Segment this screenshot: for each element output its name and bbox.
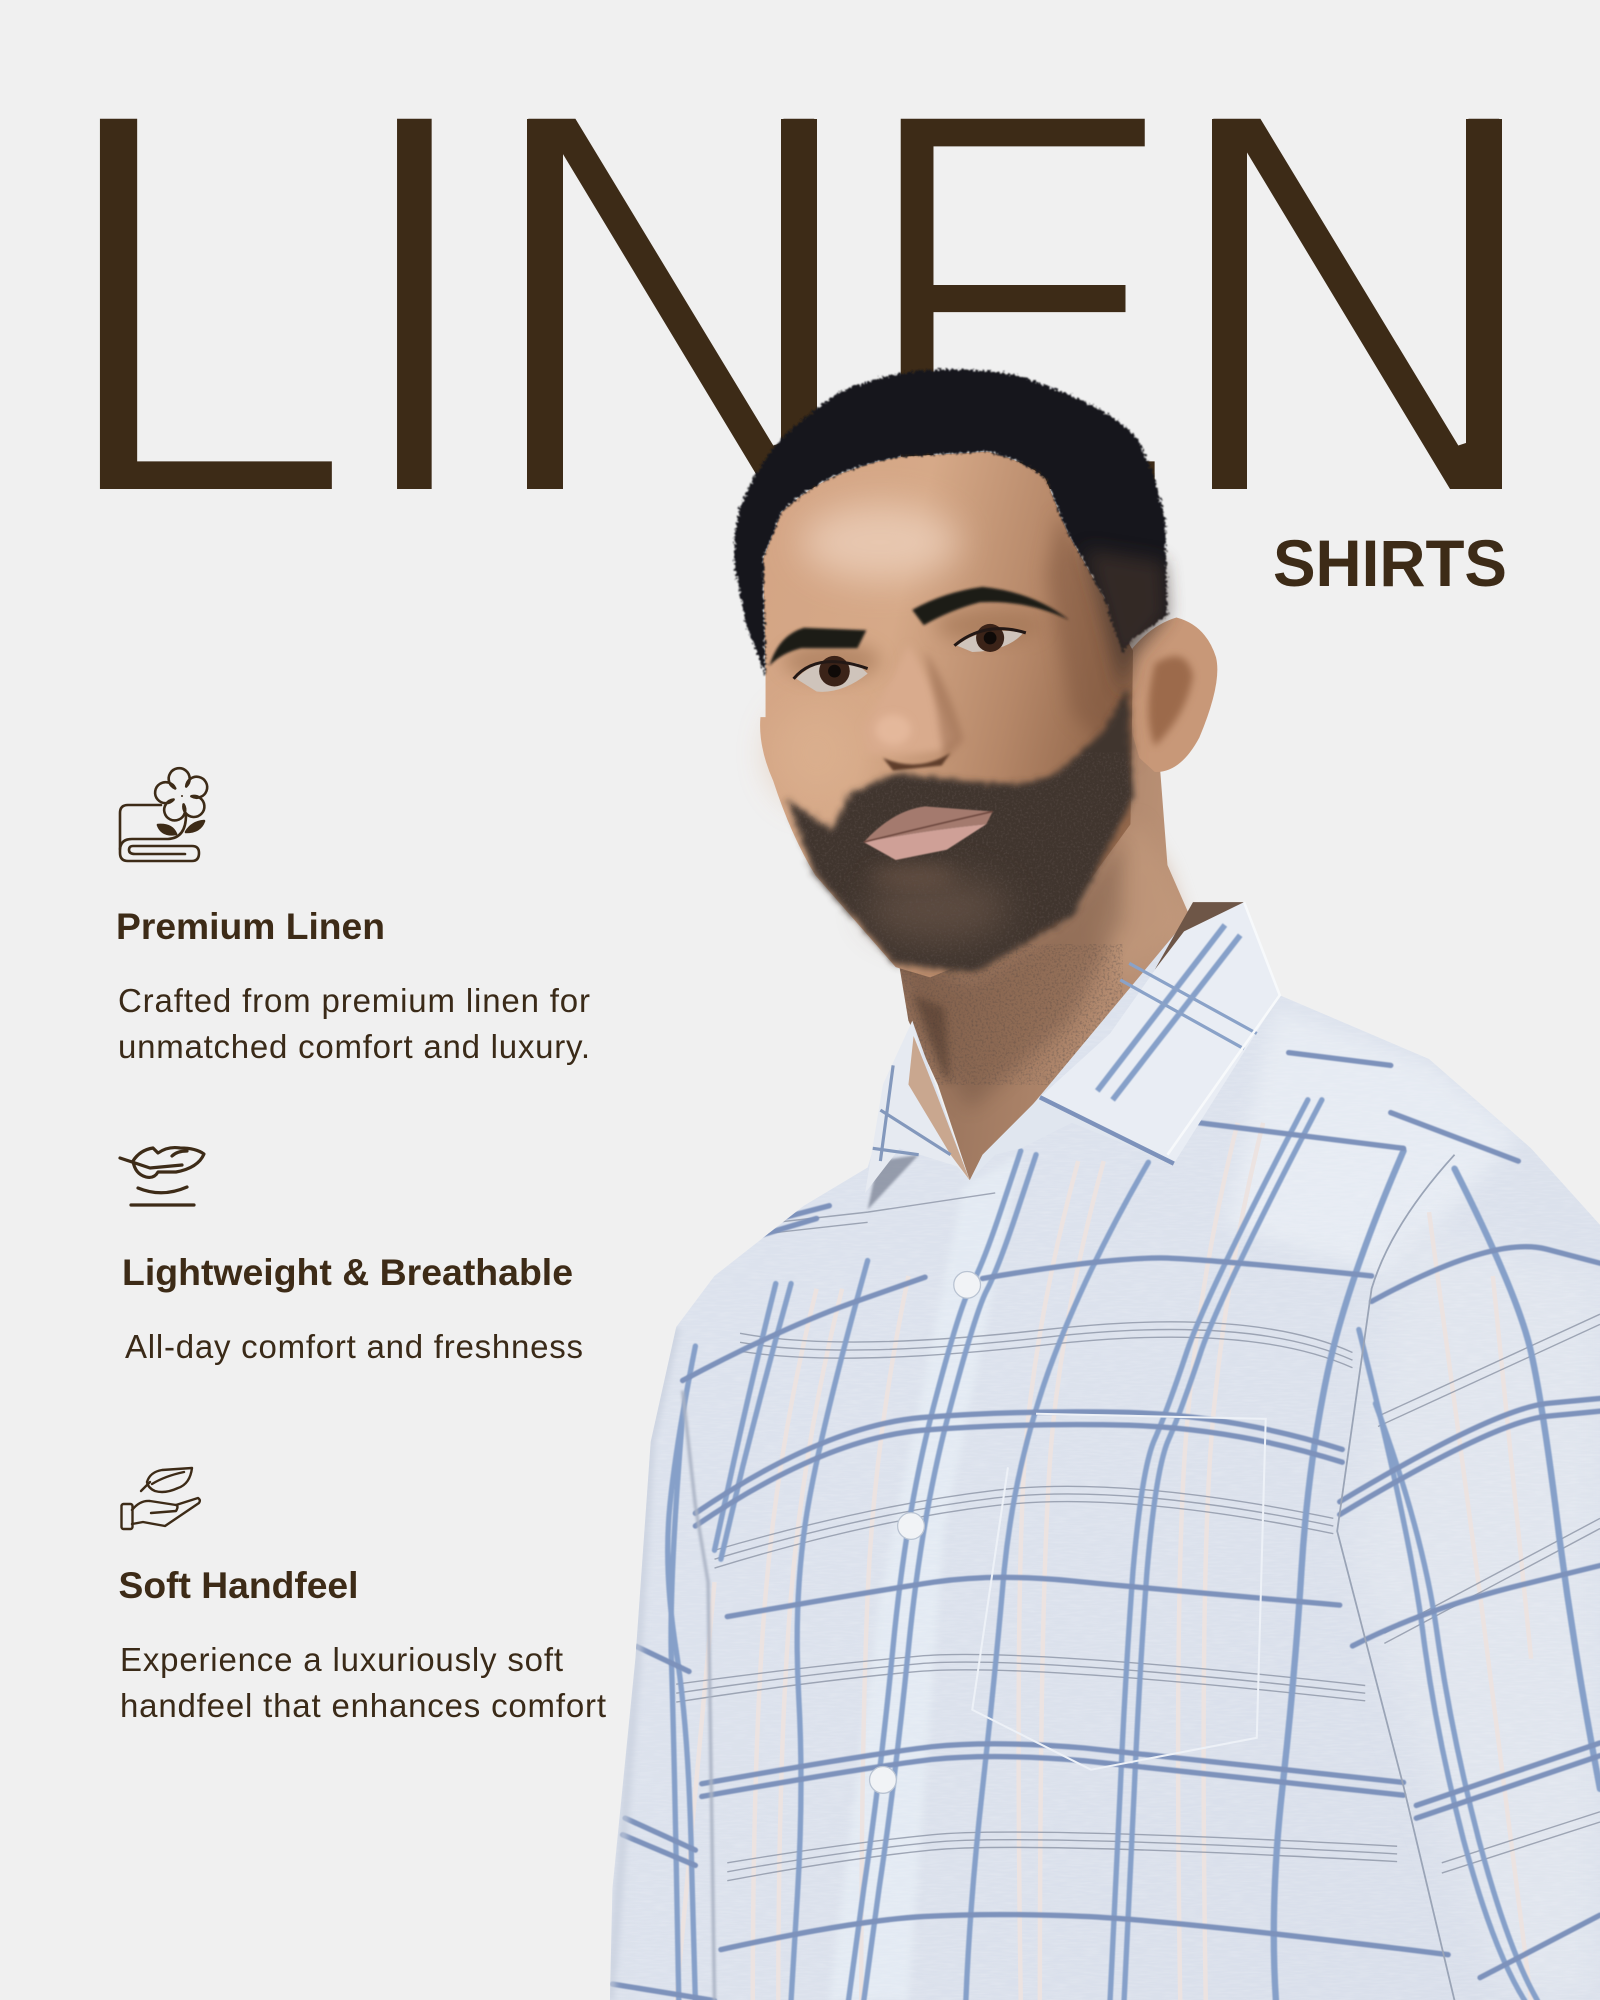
thin grey check lines — [676, 1193, 1600, 1881]
left eye — [794, 656, 868, 692]
ear — [1130, 618, 1217, 772]
heading: soft handfeel: Soft Handfeel — [118, 1565, 358, 1606]
description: lightweight and breathable: All-day comfort and freshness — [125, 1328, 583, 1365]
eye sockets — [783, 642, 880, 680]
temple shadow — [1046, 510, 1130, 766]
lips — [864, 806, 993, 860]
edge shading — [610, 1327, 676, 2000]
buttons — [870, 1271, 981, 1793]
icon: towel with flower — [120, 768, 207, 861]
face — [760, 452, 1133, 977]
description: premium linen: Crafted from premium linen for — [118, 982, 590, 1019]
icon: feather — [120, 1148, 204, 1205]
hair — [734, 369, 1167, 676]
eyebrows — [769, 587, 1069, 666]
title: LINEN: N — [477, 0, 865, 616]
subtitle: SHIRTS: SHIRTS — [1273, 526, 1507, 600]
blue vertical checks — [668, 1100, 1600, 2000]
description: soft handfeel: handfeel that enhances comfort — [120, 1687, 606, 1724]
title: LINEN: E — [854, 0, 1182, 615]
neck — [893, 715, 1194, 1180]
sideburn fade — [1085, 549, 1167, 695]
title: LINEN: L — [46, 0, 358, 616]
nose — [863, 644, 963, 771]
description: soft handfeel — [120, 1641, 606, 1724]
description: premium linen: unmatched comfort and luxury. — [118, 1028, 590, 1065]
pocket — [972, 1414, 1266, 1770]
cream stripes — [676, 1123, 1531, 2000]
collar — [865, 902, 1280, 1193]
sleeve seams — [1337, 1155, 1455, 2000]
icon: hand with leaf — [122, 1468, 200, 1529]
blue horizontal checks — [612, 1053, 1600, 2000]
title: LINEN: N — [1162, 0, 1550, 616]
description: soft handfeel: Experience a luxuriously soft — [120, 1641, 563, 1678]
forehead highlight — [801, 504, 959, 581]
beard — [786, 686, 1136, 976]
photo: man in linen shirt — [600, 369, 1600, 2000]
fabric grain — [600, 880, 1600, 2000]
cheek tone — [773, 704, 860, 801]
eyes — [794, 624, 1026, 692]
feature: soft handfeel — [118, 1468, 606, 1724]
right eye — [954, 624, 1026, 652]
feature: lightweight and breathable — [120, 1148, 583, 1365]
heading: lightweight and breathable: Lightweight & Breathable — [122, 1252, 573, 1293]
title: LINEN — [46, 0, 1550, 616]
title: LINEN: I — [342, 0, 487, 616]
feature: premium linen — [116, 768, 590, 1065]
shirt — [600, 880, 1600, 2000]
description: premium linen — [118, 982, 590, 1065]
placket highlight — [835, 1170, 1010, 1997]
heading: premium linen: Premium Linen — [116, 906, 385, 947]
